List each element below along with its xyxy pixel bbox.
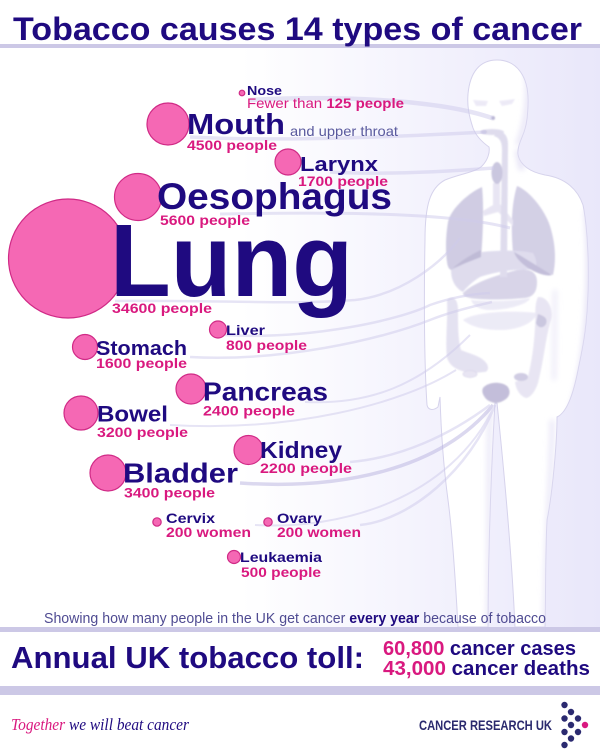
label: bowel: Bowel [97, 402, 168, 426]
label: mouth: 4500 people [187, 137, 277, 153]
label: cervix: 200 women [166, 524, 251, 540]
organ: lungs [446, 99, 555, 403]
label: oesophagus [114, 174, 392, 228]
label: nose: Nose [247, 83, 282, 98]
organ: trachea [483, 183, 513, 226]
label: larynx: 1700 people [298, 173, 388, 189]
organ: pancreas [471, 298, 530, 310]
footer [0, 695, 600, 756]
label: kidney: Kidney [260, 437, 342, 463]
label: bladder: Bladder [123, 458, 238, 488]
caption: Showing how many people in the UK get cancer every year because of tobacco [44, 610, 546, 627]
label: bladder [90, 455, 238, 500]
organ: oesophagus [494, 131, 508, 277]
label: cervix: Cervix [166, 510, 215, 526]
title band [0, 0, 600, 48]
cancer cases: 60,800 cancer cases [383, 638, 576, 660]
organ: small bowel [463, 312, 537, 330]
organ: colon right [515, 297, 552, 398]
annual toll heading: Annual UK tobacco toll: [11, 640, 364, 675]
title: Tobacco causes 14 types of cancer [13, 11, 582, 47]
label: oesophagus: 5600 people [160, 212, 250, 228]
organ: larynx [492, 162, 502, 184]
cancer deaths: 43,000 cancer deaths [383, 658, 590, 680]
organ: mouth [480, 129, 504, 135]
leader lines [115, 98, 510, 526]
label: bowel: 3200 people [97, 424, 188, 440]
label: bladder: 3400 people [124, 484, 215, 500]
label: stomach: 1600 people [96, 355, 187, 371]
logo text: CANCER RESEARCH UK [419, 717, 552, 733]
label: leukaemia [228, 549, 322, 580]
label: larynx [275, 149, 388, 189]
label: nose [239, 83, 404, 111]
label: ovary: 200 women [277, 524, 361, 540]
label: pancreas: 2400 people [203, 402, 295, 418]
label: leukaemia: Leukaemia [240, 549, 322, 565]
label: stomach [72, 334, 187, 371]
human body figure [424, 60, 589, 627]
organ: liver [451, 251, 536, 292]
organ: colon left [446, 298, 488, 373]
label: nose: Fewer than 125 people [247, 95, 404, 111]
label: ovary: Ovary [277, 510, 322, 526]
organ: bladder [482, 383, 510, 403]
label: lung: Lung [110, 203, 353, 318]
background [0, 48, 600, 628]
label: liver [210, 321, 307, 353]
label: mouth: and upper throat [290, 123, 398, 139]
label: lung [8, 199, 353, 318]
label: kidney [234, 436, 352, 476]
label: larynx: Larynx [300, 154, 378, 176]
label: lung: 34600 people [112, 300, 212, 316]
label: oesophagus: Oesophagus [157, 176, 392, 217]
label: liver: 800 people [226, 337, 307, 353]
face details [473, 99, 515, 106]
label: stomach: Stomach [96, 338, 187, 360]
label: mouth: Mouth [187, 109, 285, 141]
label: cervix [153, 510, 251, 540]
label: mouth [147, 103, 398, 153]
tagline: Together we will beat cancer [11, 715, 189, 734]
label: ovary [264, 510, 361, 540]
label: liver: Liver [226, 322, 266, 338]
label: pancreas: Pancreas [203, 376, 328, 406]
organ: nose [491, 116, 495, 120]
label: leukaemia: 500 people [241, 564, 321, 580]
label: pancreas [176, 374, 328, 418]
organ: stomach [463, 270, 537, 300]
toll band [0, 627, 600, 695]
label: bowel [64, 396, 188, 440]
organ: kidneys [463, 370, 477, 378]
label: kidney: 2200 people [260, 460, 352, 476]
logo dots [561, 702, 588, 748]
body shading [488, 70, 589, 627]
